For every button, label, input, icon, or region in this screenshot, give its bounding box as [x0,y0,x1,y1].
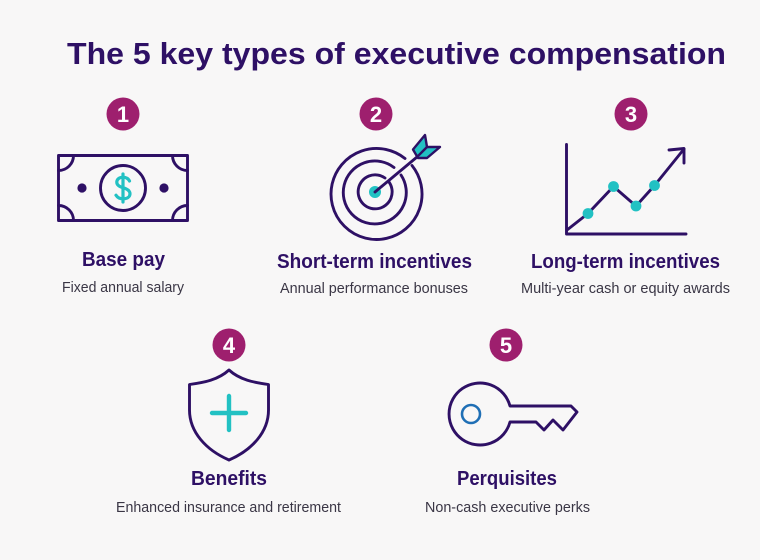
heading: Base pay [82,249,166,271]
heading: Short-term incentives [277,251,472,273]
title: The 5 key types of executive compensation [67,36,726,71]
badge 5 [490,328,522,362]
description: Annual performance bonuses [280,281,468,297]
badge 3: 3 [625,102,637,127]
description: Enhanced insurance and retirement [116,500,341,516]
badge 4 [212,328,246,362]
badge 2: 2 [370,102,382,127]
icon: target with arrow [331,135,440,239]
badge 5: 5 [500,333,512,358]
heading: Benefits [191,468,267,490]
heading: Perquisites [457,468,557,490]
badge 3 [614,98,648,130]
panel: perquisites [425,328,590,516]
icon: shield with plus [190,370,268,460]
description: Fixed annual salary [62,280,185,296]
icon: banknote [58,156,188,220]
panel: base pay [58,98,188,296]
badge 2 [360,98,392,130]
panel: benefits [116,328,341,516]
badge 1: 1 [117,102,129,127]
heading: Long-term incentives [531,251,720,273]
panel: short-term incentives [277,98,472,297]
description: Non-cash executive perks [425,500,590,516]
panel: long-term incentives [521,98,730,297]
badge 1 [106,98,140,130]
description: Multi-year cash or equity awards [521,281,730,297]
badge 4: 4 [223,333,236,358]
icon: growth chart [566,144,686,234]
icon: key [449,383,577,445]
